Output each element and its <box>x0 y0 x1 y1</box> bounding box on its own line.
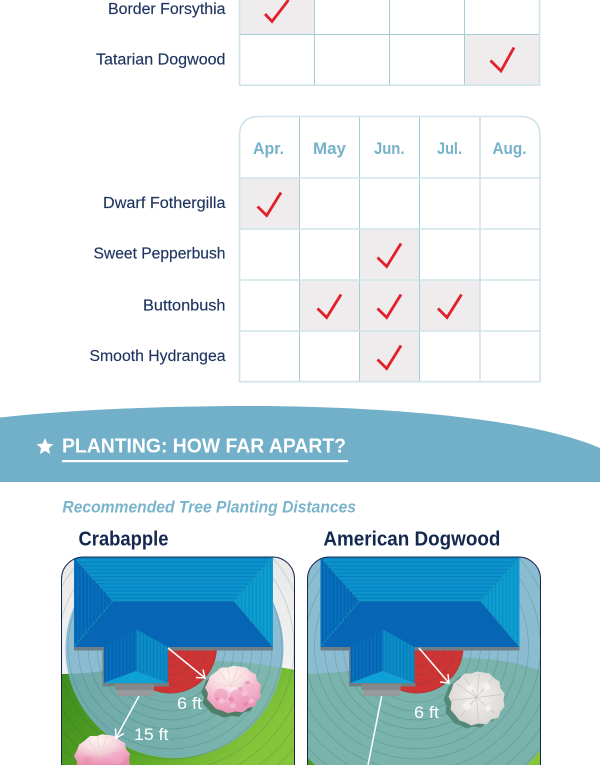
highlighted cells <box>240 178 480 382</box>
label: 6 ft: 6 ft <box>414 703 439 722</box>
column headers: Aug. <box>492 139 526 158</box>
label: 15 ft: 15 ft <box>134 725 169 744</box>
house roof <box>74 557 273 696</box>
panel: Crabapple diagram <box>61 556 295 765</box>
label: Buttonbush: Buttonbush <box>143 298 226 314</box>
heading: PLANTING: HOW FAR APART? <box>62 436 346 458</box>
tree: crabapple near steps <box>74 734 130 765</box>
column headers: Apr. <box>253 139 284 158</box>
label: Border Forsythia: Border Forsythia <box>108 1 226 18</box>
arrow: 6 ft <box>168 648 205 678</box>
tree: crabapple near house <box>201 666 261 718</box>
icon: check <box>490 48 514 71</box>
checks <box>258 192 462 368</box>
icon: check <box>265 0 288 22</box>
label: Dwarf Fothergilla: Dwarf Fothergilla <box>103 195 226 212</box>
chart: bottom bloom table <box>90 116 540 382</box>
column headers: Jun. <box>374 139 404 158</box>
label: 6 ft: 6 ft <box>177 694 202 713</box>
chart: top bloom table <box>96 0 540 85</box>
arrow: 15 ft <box>116 696 139 738</box>
panel: American Dogwood diagram <box>307 556 541 765</box>
column headers: May <box>313 139 347 158</box>
tree: American dogwood <box>444 672 504 728</box>
label: Smooth Hydrangea: Smooth Hydrangea <box>90 348 226 365</box>
column headers <box>253 139 526 158</box>
highlighted cell: Border Forsythia <box>240 0 314 34</box>
column headers: Jul. <box>437 139 462 158</box>
label: Sweet Pepperbush: Sweet Pepperbush <box>94 246 226 262</box>
heading: Crabapple: Crabapple <box>78 529 168 551</box>
section banner <box>0 406 600 482</box>
heading: American Dogwood: American Dogwood <box>323 529 500 551</box>
arrow: long distance <box>368 696 382 765</box>
subheading: Recommended Tree Planting Distances <box>62 498 356 517</box>
highlighted cell: Tatarian Dogwood <box>464 34 540 85</box>
label: Tatarian Dogwood: Tatarian Dogwood <box>96 52 226 68</box>
arrow: 6 ft <box>419 648 449 683</box>
house roof <box>320 557 520 696</box>
icon: star <box>37 438 53 454</box>
